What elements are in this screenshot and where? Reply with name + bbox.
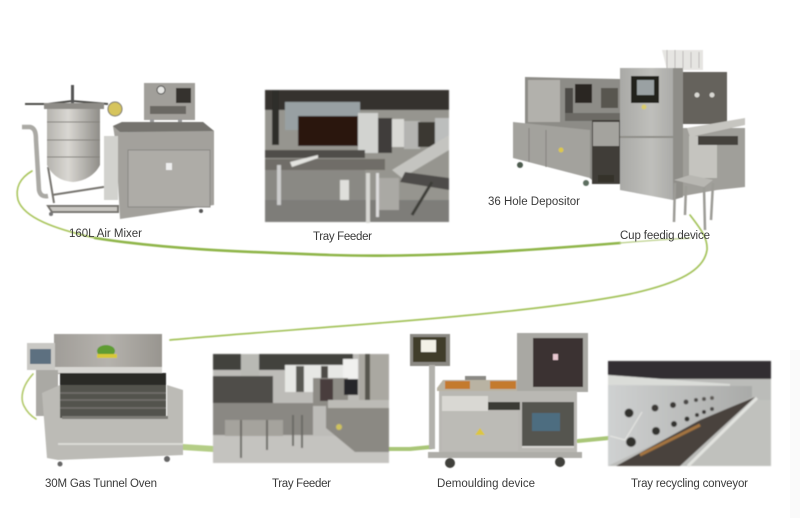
demoulder pole [429,365,435,449]
demoulder base and wheels [428,452,582,458]
label: Demoulding device: Demoulding device [437,478,535,490]
mixer control box [144,83,195,120]
depositor back section [683,72,727,124]
demoulder trays [437,380,525,391]
depositor side rack [683,128,745,196]
label: Cup feeding device: Cup feedig device [620,230,710,242]
demoulder upper box [517,333,588,392]
machine: 30M gas tunnel oven [27,334,183,466]
depositor upper section [525,77,620,180]
photo: tray feeder (bottom) [213,354,389,463]
demoulder monitor [410,334,450,366]
machine: 36 hole depositor [513,50,745,230]
mixer frame [48,167,118,212]
depositor stool [674,175,713,187]
mixer pipe [22,127,48,196]
photo: tray feeder (top) [265,90,449,223]
oven logo [97,345,115,357]
depositor table [687,118,745,137]
label: Tray Feeder (top): Tray Feeder [313,231,372,243]
depositor tower [620,68,683,200]
demoulder body [439,391,577,453]
mixer cabinet [113,122,214,219]
depositor lower body [513,122,590,178]
machine: demoulding device [410,333,588,468]
label: Tray recycling conveyor: Tray recycling conveyor [631,478,748,490]
label: 36 Hole Depositor: 36 Hole Depositor [488,196,580,208]
green flow line [17,171,707,449]
photo: tray recycling conveyor [608,361,771,466]
depositor cups [662,50,703,70]
oven body side [36,370,58,416]
label: 160L Air Mixer: 160L Air Mixer [69,228,142,240]
mixer pot [47,109,100,182]
label: Tray Feeder (bottom): Tray Feeder [272,478,331,490]
machine: 160L air mixer [22,83,214,219]
oven belt [60,385,166,419]
oven control panel [27,343,55,370]
oven base [42,385,183,460]
oven hood [54,334,162,374]
oven tunnel [60,373,166,387]
mixer lid and gauge [25,101,108,104]
label: 30M Gas Tunnel Oven: 30M Gas Tunnel Oven [45,478,157,490]
